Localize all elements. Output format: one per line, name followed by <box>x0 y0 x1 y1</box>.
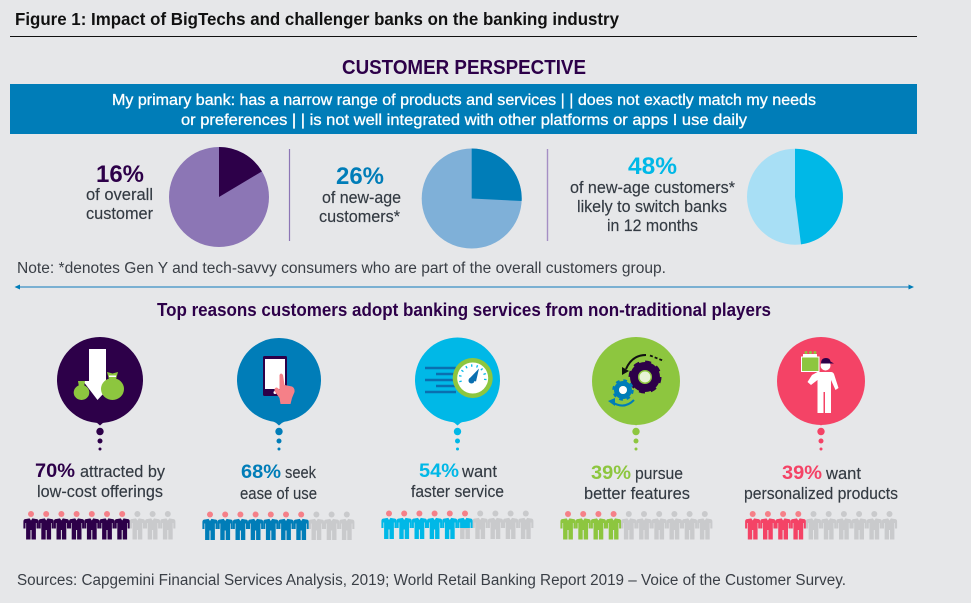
text: 70% attracted by low-cost offerings <box>35 461 166 501</box>
text: 68% seek ease of use: ease of use <box>240 485 317 503</box>
stat: 16% of overall customer: 16% <box>96 161 144 188</box>
stat: 16% of overall customer: customer <box>86 205 153 223</box>
text: 70% attracted by low-cost offerings: attracted by <box>80 463 166 481</box>
people row: 7 of 10 <box>23 511 175 540</box>
stat: 16% of overall customer: of overall <box>86 186 153 204</box>
text: 39% pursue better features: pursue <box>635 465 683 483</box>
text: 68% seek ease of use: 68% <box>241 462 281 483</box>
stat: 48% likely to switch banks: 48% <box>628 153 677 180</box>
pie chart: 48% <box>747 149 843 245</box>
column: faster service <box>381 338 533 539</box>
stat: 48% likely to switch banks <box>570 153 736 235</box>
icon: bubble with gears <box>592 337 680 450</box>
people row: 5.5 of 10 <box>381 510 533 539</box>
text: 54% want faster service <box>411 461 504 501</box>
text: 70% attracted by low-cost offerings: low-cost offerings <box>37 483 163 501</box>
title: Figure 1: Impact of BigTechs and challenger banks on the banking industry <box>15 9 619 29</box>
column: low-cost offerings <box>23 337 175 540</box>
text: 68% seek ease of use <box>240 462 317 503</box>
stat: 26% of new-age customers: of new-age <box>322 189 401 207</box>
text: 39% want personalized products <box>744 463 898 503</box>
column: personalized products <box>744 337 898 540</box>
icon: bubble with speedometer <box>415 338 500 450</box>
stat: 26% of new-age customers <box>319 163 401 226</box>
heading: top reasons: Top reasons customers adopt banking services from non-traditional players <box>157 300 771 320</box>
sources: Sources: Capgemini Financial Services Analysis, 2019; World Retail Banking Report 2019 – Voice of the Customer Survey. <box>17 572 846 589</box>
icon: bubble with person carrying box <box>777 337 865 450</box>
icon: bubble with arrow and money bags <box>57 337 143 450</box>
column: better features <box>560 337 712 540</box>
stat: 26% of new-age customers: 26% <box>336 163 384 190</box>
banner: primary bank statement: My primary bank: has a narrow range of products and services | | does not exactly match my needs <box>112 92 816 109</box>
text: 39% want personalized products: 39% <box>782 463 822 484</box>
text: 39% want personalized products: personalized products <box>744 485 898 503</box>
pie chart: 26% <box>422 148 522 248</box>
stat: 26% of new-age customers: customers* <box>319 208 401 226</box>
people row: 4 of 10 <box>560 511 712 540</box>
text: 39% pursue better features: 39% <box>591 463 631 484</box>
note: Note: *denotes Gen Y and tech-savvy consumers who are part of the overall customers group. <box>17 260 666 277</box>
column: ease of use <box>202 338 354 540</box>
heading: customer perspective: CUSTOMER PERSPECTIVE <box>342 57 586 79</box>
stat: 48% likely to switch banks: of new-age customers* <box>570 179 736 197</box>
text: 39% pursue better features: better features <box>584 485 690 503</box>
text: 68% seek ease of use: seek <box>285 464 317 482</box>
text: 54% want faster service: faster service <box>411 483 504 501</box>
stat: 16% of overall customer <box>86 161 153 223</box>
pie chart: 16% <box>169 147 269 247</box>
text: 39% pursue better features <box>584 463 690 503</box>
stat: 48% likely to switch banks: likely to switch banks <box>577 198 727 216</box>
text: 54% want faster service: 54% <box>419 461 459 482</box>
text: 54% want faster service: want <box>461 463 497 481</box>
people row: 7 of 10 <box>202 512 354 540</box>
banner: primary bank statement: or preferences | | is not well integrated with other platforms or apps I use daily <box>181 112 747 129</box>
text: 39% want personalized products: want <box>825 465 861 483</box>
text: 70% attracted by low-cost offerings: 70% <box>35 461 75 482</box>
arrow: double-headed separator <box>14 284 914 290</box>
people row: 4 of 10 <box>745 511 897 540</box>
banner: primary bank statement <box>10 84 917 134</box>
icon: bubble with tablet and hand <box>237 338 321 450</box>
stat: 48% likely to switch banks: in 12 months <box>607 217 698 235</box>
